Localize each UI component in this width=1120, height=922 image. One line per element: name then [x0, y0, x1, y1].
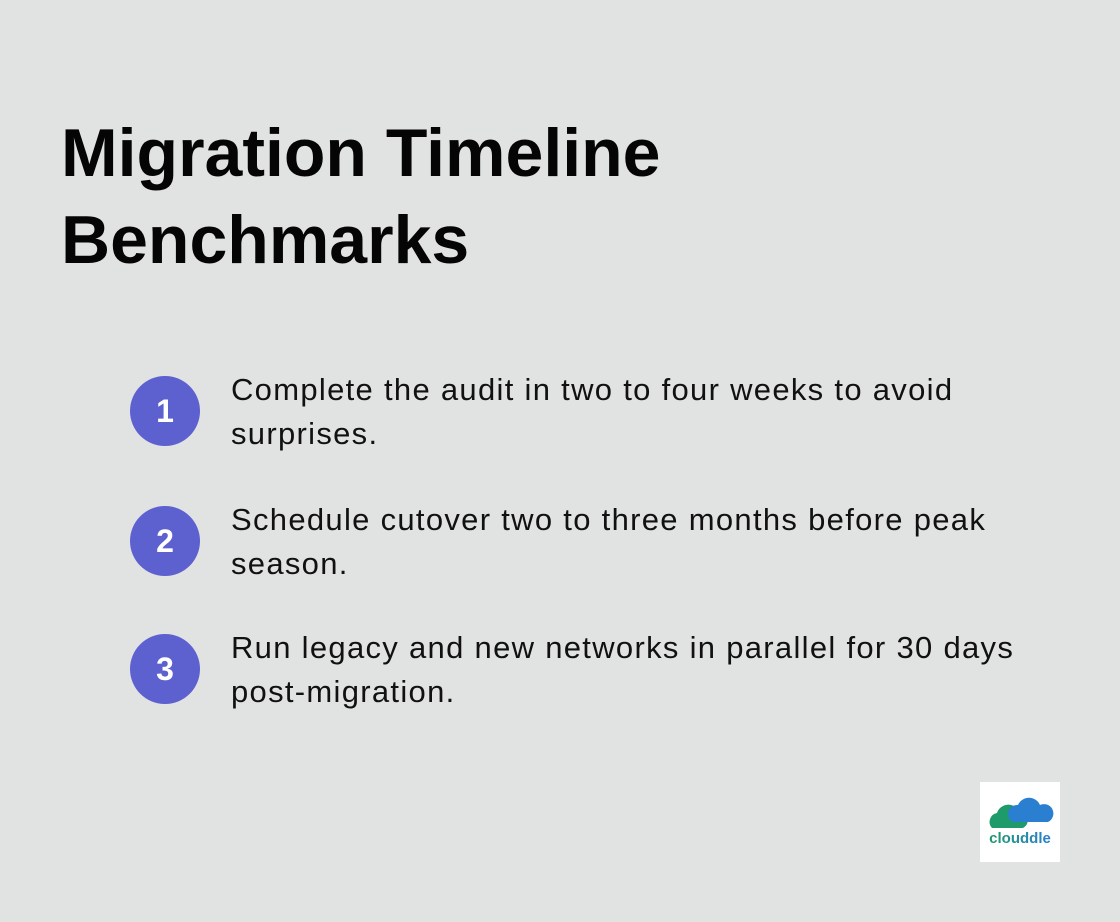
- item 2: [130, 502, 986, 581]
- text 1: [231, 372, 953, 451]
- logo: clouddle: [980, 782, 1060, 862]
- item 3: [130, 630, 1014, 709]
- title: Benchmarks: [61, 202, 469, 278]
- text 1: surprises.: [231, 416, 378, 451]
- number badge 1: 1: [156, 393, 174, 429]
- number badge 2: 2: [156, 523, 174, 559]
- logo: clouddle: clouddle: [989, 830, 1051, 847]
- text 1: Complete the audit in two to four weeks to avoid: [231, 372, 953, 407]
- text 2: season.: [231, 546, 349, 581]
- text 3: post-migration.: [231, 674, 456, 709]
- number badge 2: [130, 506, 200, 576]
- number badge 3: [130, 634, 200, 704]
- text 2: Schedule cutover two to three months before peak: [231, 502, 986, 537]
- text 3: [231, 630, 1014, 709]
- title: [61, 115, 660, 278]
- title: Migration Timeline: [61, 115, 660, 191]
- number badge 3: 3: [156, 651, 174, 687]
- number badge 1: [130, 376, 200, 446]
- text 3: Run legacy and new networks in parallel for 30 days: [231, 630, 1014, 665]
- item 1: [130, 372, 953, 451]
- text 2: [231, 502, 986, 581]
